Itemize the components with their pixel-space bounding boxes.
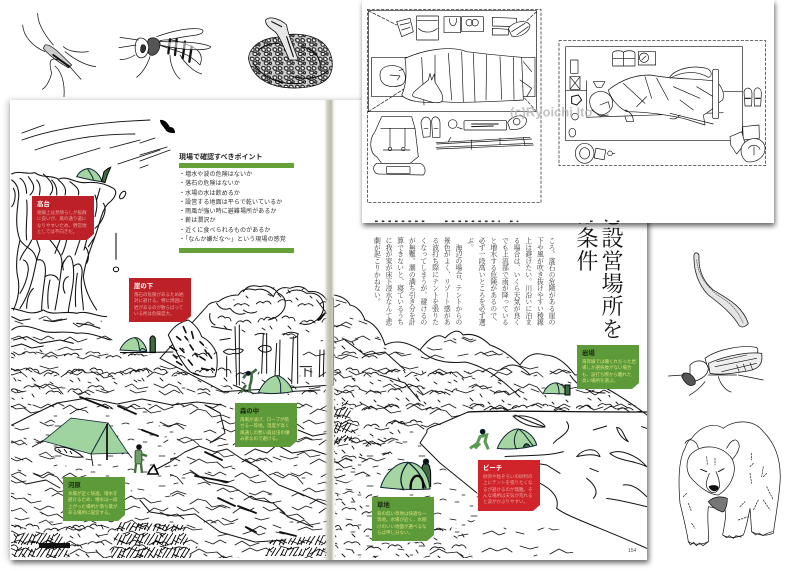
vertical body text: が無難。潮の満ち引き分を計 xyxy=(407,237,414,325)
icon: tent below the cliff xyxy=(120,336,173,353)
backpack xyxy=(371,117,418,163)
callout: below the cliff: 岩があるのが散らばって xyxy=(134,305,183,310)
page number: 154 xyxy=(628,548,637,554)
callout: meadow: 草地 xyxy=(377,502,390,509)
sleeping bag and person xyxy=(608,75,723,125)
callout: below the cliff xyxy=(129,278,191,322)
worm, fly and bear illustrations, right column xyxy=(668,252,781,546)
pack straps and poles xyxy=(670,67,711,78)
vertical body text: 劇が起こりかねない。 xyxy=(372,237,379,305)
illustration: ground texture, left page xyxy=(11,315,330,558)
gutter of the book xyxy=(324,100,336,560)
gear xyxy=(613,51,635,66)
checklist heading: 現場で確認すべきポイント xyxy=(179,154,263,161)
callout: rocky shore: も、波打ち際から離れた xyxy=(582,372,631,377)
boots, stove and poles xyxy=(421,117,440,137)
callout: rocky shore: 岩場 xyxy=(582,350,595,357)
icon: coiled snake xyxy=(248,18,332,88)
callout: rocky shore: 海岸線では磯くれだった岩 xyxy=(582,359,636,364)
sleeping mat xyxy=(372,57,535,97)
checklist items: ・「なんか嫌だな～」という現場の感覚 xyxy=(179,237,286,243)
panel: tent interior layouts xyxy=(362,0,774,223)
callout: river bank: 避けるため、増水は一段 xyxy=(68,497,118,502)
wind lines in the sky xyxy=(22,120,170,168)
callout: below the cliff: 崖の下 xyxy=(134,283,153,290)
vertical body text: 必ず一段高いところを必ず選 xyxy=(477,237,484,325)
icon: camper beside tarp xyxy=(135,444,147,473)
green rule bottom xyxy=(179,248,294,253)
callout: river bank: ある場所に設営する。 xyxy=(68,510,113,515)
callout: beach: ビーチ xyxy=(483,465,502,472)
callout: beach: 砂浜や粒ぞろいの砂利の xyxy=(483,474,532,479)
vertical heading: campsite conditions xyxy=(574,204,624,340)
callout: beach: るが避けるのが無難。そ xyxy=(483,487,532,492)
vertical heading: campsite conditions: を設営場所を xyxy=(599,204,624,340)
callout: rocky shore xyxy=(577,345,639,389)
diagram: tent layout two xyxy=(559,41,766,166)
icon: wasp xyxy=(119,29,211,79)
icon: tent and camper in the forest xyxy=(241,369,293,394)
illustration: gravel streaks xyxy=(80,397,296,536)
icon: tent on the clifftop xyxy=(77,167,111,183)
diagram: tent layout one xyxy=(367,9,541,203)
callout: meadow: らば申し分ない。 xyxy=(377,530,413,535)
illustration: meadow and beach texture xyxy=(335,432,575,558)
vertical body text: ころ。落石の危険がある崖の xyxy=(547,237,554,325)
checklist items: ・増水や波の危険はないか xyxy=(179,172,252,178)
callout: rocky shore: 場しか選択肢がない場合 xyxy=(582,365,632,370)
icon: camp fire xyxy=(148,465,158,474)
callout: meadow: 等地。水場が近く、水捌 xyxy=(377,517,426,522)
callout: below the cliff: 落石の危険があるため絶 xyxy=(134,292,184,297)
callout: in the forest: 風通しの悪い森は虫の棲 xyxy=(240,430,290,435)
callout: river bank: 上がった場所か落ち葉が xyxy=(68,504,118,509)
vertical body text: る波打ち際にテントを張りた xyxy=(431,237,438,325)
icon: bear xyxy=(679,422,780,546)
icon: mosquito xyxy=(23,13,96,97)
gear row xyxy=(397,18,413,37)
icon: flying bird xyxy=(160,120,175,133)
callout: clifftop: としては不向きだ。 xyxy=(37,229,77,234)
illustration: hill outlines xyxy=(334,295,647,493)
callout: clifftop: 高台 xyxy=(37,201,50,208)
callout: rocky shore: 高い場所を選ぶ。 xyxy=(582,378,618,383)
callout: clifftop: に良いが、風の通り道に xyxy=(37,216,86,221)
illustration: cliff xyxy=(12,172,127,348)
callout: clifftop xyxy=(32,196,94,240)
cropped text remnants at the card edge xyxy=(375,220,623,223)
icon: tent and camper on the beach xyxy=(470,429,537,449)
callout: in the forest: 森の中 xyxy=(240,408,259,415)
vertical body text: 算できないと、寝ているうち xyxy=(396,237,403,325)
checklist items: ・雨風が強い時に避難場所があるか xyxy=(179,209,277,215)
illustration: forest canopy and trees xyxy=(160,286,333,393)
vertical body text: くなってしまうが、避けるの xyxy=(419,237,426,325)
callout: beach: 上にテントを張りたくな xyxy=(483,480,532,485)
icon: horsefly xyxy=(668,347,763,395)
panel: checklist of points to confirm on site xyxy=(179,153,294,253)
checklist items: ・薪は潤沢か xyxy=(179,218,216,224)
callout: river bank: 水場が近く快適。増水を xyxy=(68,491,118,496)
vertical heading: campsite conditions: ぶ条件 xyxy=(574,204,599,272)
callout: beach xyxy=(478,460,540,511)
callout: river bank: 河原 xyxy=(68,482,81,489)
callout: in the forest xyxy=(235,403,297,447)
illustration: shoreline and waves xyxy=(505,422,647,548)
vertical body text: 海辺の場合、テントからの xyxy=(454,244,461,325)
illustration: ground contour lines xyxy=(12,398,329,542)
checklist items xyxy=(179,170,286,243)
callout: meadow: 背の低い草地は快適な一 xyxy=(377,511,426,516)
icon: tent on the meadow xyxy=(381,459,431,489)
callout: in the forest: 両風が凌げ、ロープが張 xyxy=(240,417,289,422)
checklist items: ・落石の危険はないか xyxy=(179,181,240,187)
callout: clifftop: なりやすいため、野営地 xyxy=(37,223,86,228)
checklist items: ・設営する地面は平らで乾いているか xyxy=(179,200,282,206)
callout: clifftop: 稜線上は見晴らしが抜群 xyxy=(37,210,86,215)
icon: leech xyxy=(694,253,748,327)
panel: open book spread with camp site landscape xyxy=(10,100,647,560)
illustration: tarp shelter xyxy=(32,418,132,466)
checklist items: ・近くに食べられるものがあるか xyxy=(179,228,271,234)
vertical body text: と増水する危険があるので、 xyxy=(489,237,496,325)
callout: river bank xyxy=(63,477,125,521)
vertical body text: 景色がよく、リゾート感があ xyxy=(442,237,449,325)
vertical body text: でも上流部で雨が降っている xyxy=(500,237,507,325)
callout: in the forest: み家なので避ける。 xyxy=(240,436,280,441)
vertical body text: に我が家が床下浸水なんて悲 xyxy=(384,237,391,325)
callout: meadow: けのいい地面が選べるな xyxy=(377,524,426,529)
callout: meadow xyxy=(372,497,434,541)
insect and snake illustrations, top row xyxy=(22,13,333,97)
illustration: right page hills xyxy=(334,295,647,490)
callout: below the cliff: 対に避ける。特に周囲に xyxy=(134,298,184,303)
callout: below the cliff: いる所は危険度大。 xyxy=(134,311,174,316)
vertical body text: 下や風が吹き抜けやすい稜線 xyxy=(535,237,542,325)
watermark: (c)Ryoichi Ito xyxy=(510,105,592,120)
vertical body text xyxy=(372,237,556,326)
checklist items: ・水場の水は飲めるか xyxy=(179,191,240,197)
green rule top xyxy=(179,163,294,168)
icon: tent and camper on the rocks xyxy=(543,383,570,395)
illustration: forest foliage texture xyxy=(170,286,326,395)
page footer label xyxy=(39,543,70,548)
callout: in the forest: せる一等地。湿度が高く xyxy=(240,423,290,428)
sleeping bag and person xyxy=(402,49,523,103)
vertical body text: る場合は、いくら天気が良く xyxy=(512,237,519,325)
vertical body text: 上は避けたい。川沿いに泊ま xyxy=(524,237,531,325)
callout: beach: と波がかぶりやすい。 xyxy=(483,499,528,504)
callout: beach: んな場所は天気が荒れる xyxy=(483,493,532,498)
vertical body text: ぶ。 xyxy=(466,237,473,251)
